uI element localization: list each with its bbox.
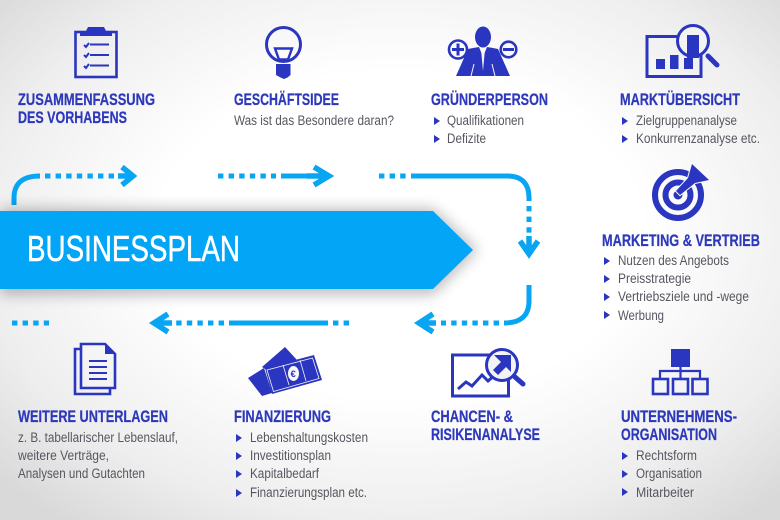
heading: WEITERE UNTERLAGEN bbox=[18, 407, 168, 426]
list: Nutzen des Angebots bbox=[618, 253, 729, 268]
text: weitere Verträge, bbox=[17, 448, 109, 463]
list: Zielgruppenanalyse bbox=[636, 113, 737, 128]
heading: DES VORHABENS bbox=[18, 108, 127, 127]
flow arrow: bottom middle bbox=[154, 314, 349, 332]
section: Marktübersicht bbox=[620, 26, 760, 146]
text: Analysen und Gutachten bbox=[18, 466, 145, 481]
icon: money bills bbox=[248, 347, 322, 396]
section: Chancen- und Risikenanalyse bbox=[431, 350, 540, 444]
list bbox=[434, 113, 524, 146]
icon: money bills: € bbox=[290, 369, 296, 380]
icon: line chart with magnifier bbox=[452, 350, 523, 396]
list: Investitionsplan bbox=[250, 448, 331, 463]
flow arrow: top middle bbox=[218, 167, 329, 185]
list: Organisation bbox=[636, 466, 702, 481]
list: Rechtsform bbox=[636, 448, 697, 463]
icon: organisation chart bbox=[653, 349, 708, 394]
icon: light bulb bbox=[266, 28, 300, 79]
list bbox=[622, 448, 702, 500]
flow arrow: top right going down bbox=[379, 176, 538, 254]
list bbox=[604, 253, 749, 323]
flow arrow: bottom left bbox=[12, 320, 49, 326]
heading: UNTERNEHMENS- bbox=[621, 407, 737, 426]
list: Defizite bbox=[447, 131, 486, 146]
icon: person with plus and minus bbox=[449, 26, 516, 76]
text: z. B. tabellarischer Lebenslauf, bbox=[18, 430, 178, 445]
banner: Businessplan: BUSINESSPLAN bbox=[27, 228, 240, 269]
list: Finanzierungsplan etc. bbox=[250, 485, 367, 500]
section: Weitere Unterlagen bbox=[17, 344, 178, 481]
heading: ORGANISATION bbox=[621, 425, 717, 444]
section: Marketing & Vertrieb bbox=[602, 164, 760, 323]
list: Kapitalbedarf bbox=[250, 466, 319, 481]
section: Unternehmensorganisation bbox=[621, 349, 737, 500]
list: Mitarbeiter bbox=[636, 485, 694, 500]
heading: CHANCEN- & bbox=[431, 407, 513, 426]
text: Was ist das Besondere daran? bbox=[234, 113, 394, 128]
icon: target with arrow bbox=[655, 164, 709, 218]
heading: GRÜNDERPERSON bbox=[431, 90, 548, 109]
section: Gründerperson bbox=[431, 26, 548, 146]
list bbox=[622, 113, 760, 146]
text bbox=[17, 430, 178, 481]
heading: GESCHÄFTSIDEE bbox=[234, 90, 339, 109]
list: Qualifikationen bbox=[447, 113, 524, 128]
icon: documents bbox=[75, 344, 115, 394]
banner: Businessplan bbox=[0, 211, 473, 289]
banner shadow bbox=[0, 208, 478, 295]
list: Preisstrategie bbox=[618, 271, 691, 286]
heading: ZUSAMMENFASSUNG bbox=[18, 90, 155, 109]
section: Geschäftsidee bbox=[234, 28, 394, 128]
list: Konkurrenzanalyse etc. bbox=[636, 131, 760, 146]
list: Vertriebsziele und -wege bbox=[618, 289, 749, 304]
section: Zusammenfassung bbox=[18, 27, 155, 127]
list: Werbung bbox=[618, 308, 664, 323]
icon: bar chart with magnifier bbox=[647, 26, 717, 76]
heading: RISIKENANALYSE bbox=[431, 425, 540, 444]
list: Lebenshaltungskosten bbox=[250, 430, 368, 445]
section: Finanzierung bbox=[234, 347, 368, 500]
list bbox=[236, 430, 368, 500]
heading: MARKTÜBERSICHT bbox=[620, 90, 740, 109]
flow arrow: bottom right going left bbox=[419, 285, 529, 332]
flow arrow: top left bbox=[14, 167, 133, 205]
icon: clipboard bbox=[76, 27, 116, 77]
heading: FINANZIERUNG bbox=[234, 407, 331, 426]
